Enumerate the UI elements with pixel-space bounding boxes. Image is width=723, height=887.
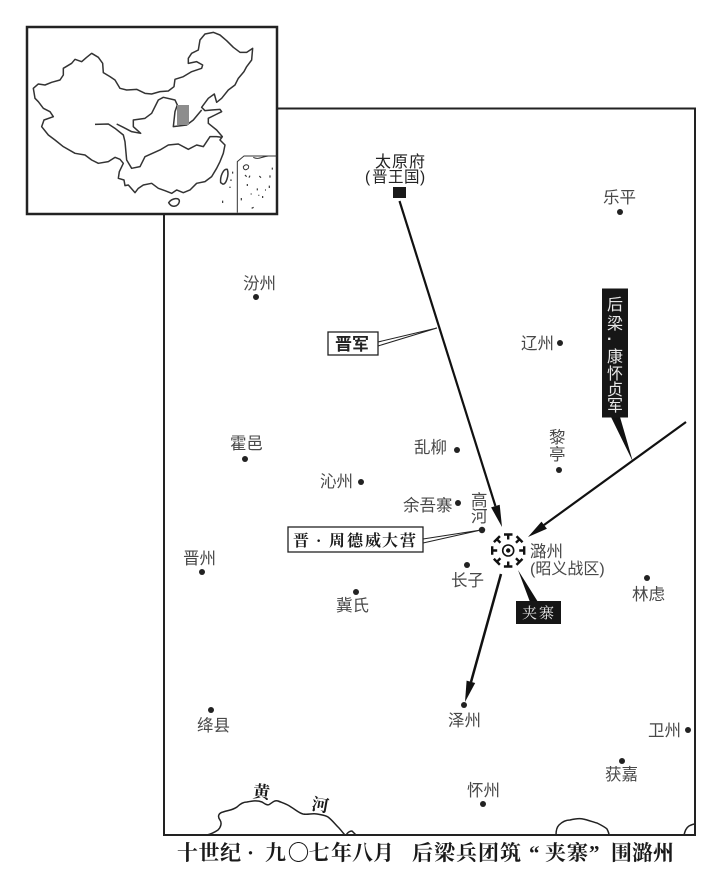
capital marker and label: Taiyuan — [365, 153, 425, 198]
label: Yellow River: 河 — [310, 795, 330, 816]
capital marker and label: Taiyuan: 太原府 — [375, 153, 425, 171]
arrow: Kang Huaizhen army — [528, 422, 686, 537]
place: 林虑: 林虑 — [632, 585, 665, 604]
callout: Later Liang Kang Huaizhen army: 梁 — [607, 315, 623, 333]
place: 辽州: 辽州 — [521, 334, 554, 353]
place: 绛县: 绛县 — [197, 716, 230, 735]
place: 黎亭: 黎 — [549, 428, 566, 447]
place: 高河: 高 — [471, 491, 488, 510]
place: 获嘉: 获嘉 — [605, 765, 638, 784]
place: 长子: 长子 — [451, 571, 484, 590]
place: 怀州 — [467, 781, 500, 807]
place: 长子 — [451, 562, 484, 590]
South China Sea inset — [237, 156, 277, 213]
label: Luzhou — [530, 542, 605, 578]
arrow: Jin army — [400, 201, 502, 527]
place: 黎亭 — [549, 428, 566, 473]
callout: Later Liang Kang Huaizhen army — [602, 288, 633, 462]
place: 绛县 — [197, 707, 230, 735]
arrow: to Zezhou — [465, 574, 501, 702]
label: Yellow River: 黄 — [252, 781, 273, 803]
callout: Jin army: 晋军 — [335, 335, 369, 354]
China outline — [33, 32, 253, 193]
callout: Later Liang Kang Huaizhen army: 后 — [607, 296, 623, 314]
place: 霍邑 — [230, 435, 263, 462]
place: 冀氏: 冀氏 — [336, 596, 369, 615]
Yellow River outline — [207, 801, 695, 835]
label: Luzhou: (昭义战区) — [530, 560, 605, 578]
place: 泽州: 泽州 — [448, 711, 481, 730]
main map frame — [164, 108, 695, 835]
place: 沁州: 沁州 — [320, 472, 353, 491]
place: 获嘉 — [605, 758, 638, 784]
place: 乐平: 乐平 — [603, 188, 636, 207]
callout: jiazhai: 夹寨 — [522, 605, 556, 622]
place: 乱柳: 乱柳 — [414, 438, 447, 457]
callout: Later Liang Kang Huaizhen army: 贞 — [607, 381, 623, 399]
place: 泽州 — [448, 702, 481, 730]
place: 卫州: 卫州 — [648, 722, 681, 740]
place: 汾州 — [243, 274, 276, 300]
place: 林虑 — [632, 575, 665, 604]
callout: Later Liang Kang Huaizhen army: · — [607, 331, 612, 348]
place: 霍邑: 霍邑 — [230, 435, 263, 453]
place: 黎亭: 亭 — [549, 445, 566, 464]
place: 怀州: 怀州 — [467, 781, 500, 800]
callout: Jin army — [328, 328, 437, 355]
callout: Later Liang Kang Huaizhen army: 军 — [607, 397, 623, 415]
place: 乱柳 — [414, 438, 460, 457]
label: Yellow River — [252, 781, 330, 816]
callout: Zhou Dewei camp: 晋·周德威大营 — [293, 531, 416, 550]
caption: 十世纪·九〇七年八月后梁兵团筑“夹寨”围潞州 — [177, 841, 674, 865]
place: 高河: 河 — [471, 507, 488, 526]
place names with dots — [183, 188, 691, 807]
callout: Later Liang Kang Huaizhen army: 怀 — [607, 365, 623, 383]
label: Luzhou: 潞州 — [530, 542, 563, 561]
place: 汾州: 汾州 — [243, 274, 276, 293]
inset map of China — [27, 27, 277, 214]
callout: Zhou Dewei camp — [288, 527, 481, 552]
highlighted region — [177, 105, 189, 125]
place: 晋州: 晋州 — [183, 550, 216, 568]
place: 余吾寨: 余吾寨 — [403, 496, 452, 515]
callout: jiazhai — [516, 570, 561, 624]
callout: Later Liang Kang Huaizhen army: 康 — [607, 348, 623, 366]
siege symbol: Luzhou — [492, 534, 524, 566]
place: 冀氏 — [336, 589, 369, 615]
place: 乐平 — [603, 188, 636, 215]
place: 高河 — [471, 491, 488, 533]
Taiwan — [221, 169, 228, 184]
Yangtze and Yellow rivers — [95, 124, 222, 168]
capital marker and label: Taiyuan: (晋王国) — [365, 168, 425, 186]
Hainan — [169, 199, 179, 206]
